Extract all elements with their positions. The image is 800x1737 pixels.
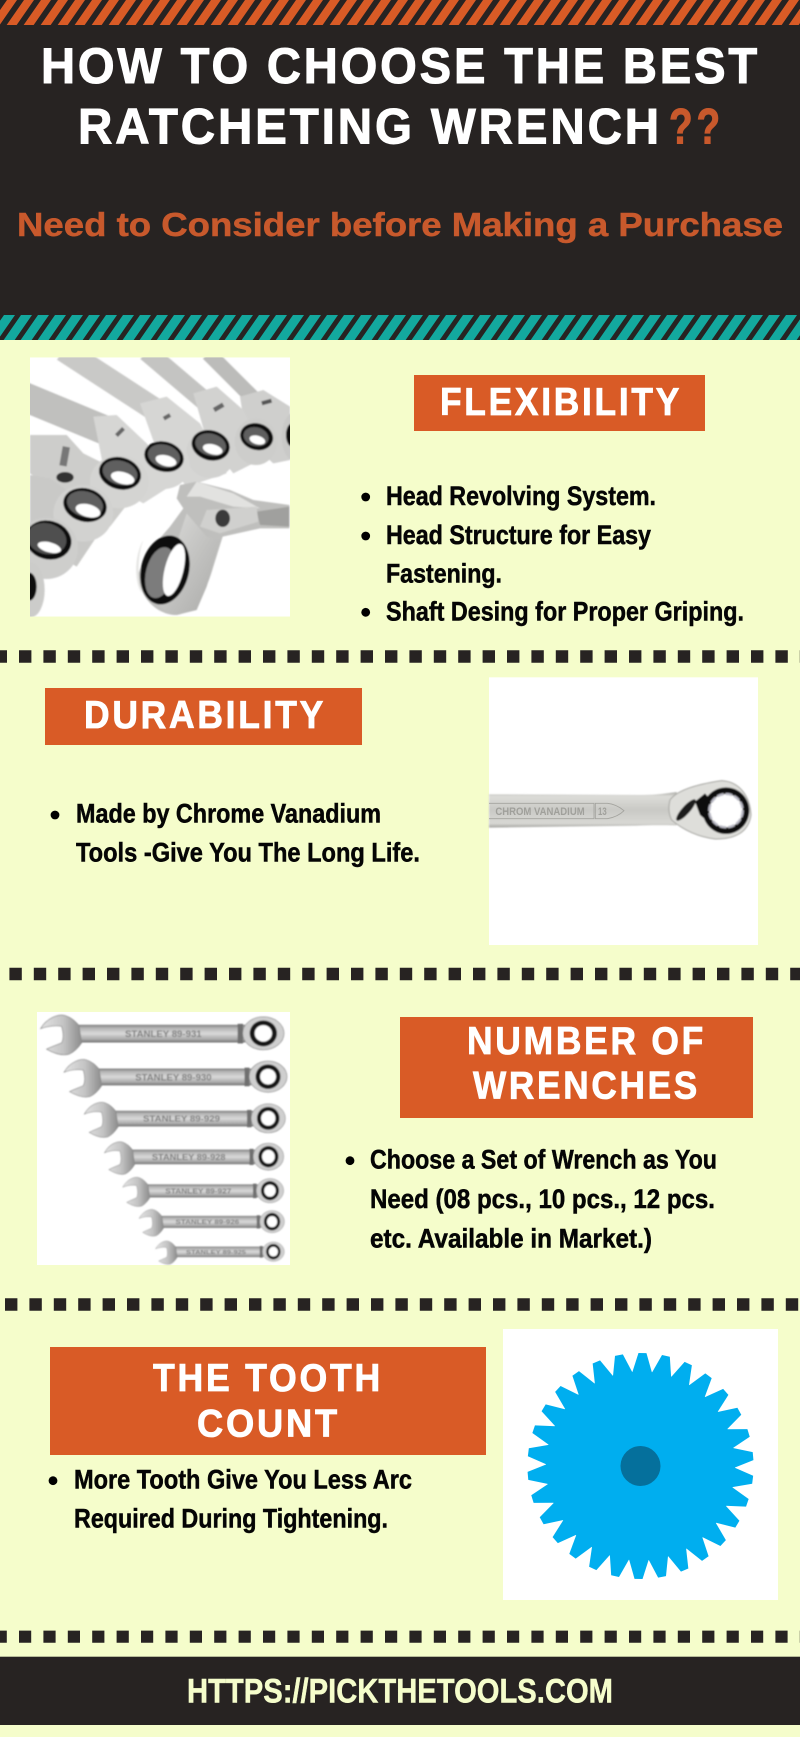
image: set of seven wrenches	[37, 1012, 290, 1265]
image: chrome vanadium wrench: CHROM VANADIUM	[495, 806, 585, 818]
wrench 6: STANLEY 89-926	[176, 1219, 240, 1226]
wrench 4: STANLEY 89-928	[152, 1153, 225, 1162]
ring heads	[242, 429, 270, 466]
image: chrome vanadium wrench: 13	[598, 806, 607, 818]
wrench 1: STANLEY 89-931	[125, 1029, 202, 1040]
title	[41, 38, 760, 154]
bullet list: the tooth count: Required During Tightening.	[74, 1503, 388, 1533]
wrench 5	[123, 1177, 284, 1206]
heading: durability: DURABILITY	[84, 694, 326, 737]
heading: flexibility	[414, 375, 705, 431]
wrench 2	[64, 1059, 287, 1097]
panel: durability	[45, 677, 758, 945]
heading: the tooth count: THE TOOTH	[153, 1357, 383, 1400]
bullet list: number of wrenches: Need (08 pcs., 10 pcs., 12 pcs.	[370, 1184, 715, 1214]
right edge head	[288, 414, 290, 460]
heading: number of wrenches: WRENCHES	[473, 1065, 700, 1108]
image: chrome vanadium wrench	[489, 677, 758, 945]
bullet list: flexibility: Head Structure for Easy	[386, 520, 651, 550]
bullet list: durability	[51, 799, 420, 867]
wrench 7: STANLEY 89-925	[186, 1250, 246, 1256]
panel: flexibility	[15, 350, 744, 627]
wrench 3	[84, 1102, 285, 1137]
footer band	[0, 1657, 800, 1725]
bullet list: flexibility: Fastening.	[386, 558, 502, 588]
heading: flexibility: FLEXIBILITY	[440, 381, 682, 424]
image: blue gear	[503, 1329, 778, 1600]
bullet list: the tooth count	[49, 1464, 412, 1533]
bullet list: number of wrenches: etc. Available in Market.)	[370, 1223, 652, 1253]
subtitle: Need to Consider before Making a Purchase	[17, 207, 783, 244]
heading: durability	[45, 688, 362, 745]
wrench 6	[139, 1209, 284, 1236]
bullet list: flexibility: Shaft Desing for Proper Griping.	[386, 597, 744, 627]
header banner	[0, 0, 800, 340]
panel: number of wrenches	[37, 1012, 753, 1265]
bullet list: the tooth count: More Tooth Give You Less Arc	[74, 1464, 412, 1494]
heading: number of wrenches: NUMBER OF	[467, 1020, 706, 1063]
bullet list: number of wrenches: Choose a Set of Wrench as You	[370, 1145, 717, 1175]
bullet list: flexibility	[361, 481, 744, 627]
wrench 1	[41, 1015, 284, 1055]
front wrench	[138, 482, 289, 615]
title: ??	[669, 98, 724, 154]
bullet list: durability: Tools -Give You The Long Life.	[76, 837, 420, 867]
title: RATCHETING WRENCH	[78, 98, 662, 154]
bullet list: number of wrenches	[346, 1145, 717, 1253]
heading: the tooth count: COUNT	[197, 1403, 340, 1446]
wrench 7	[156, 1241, 284, 1264]
wrench 4	[105, 1142, 284, 1174]
wrench 2: STANLEY 89-930	[135, 1072, 212, 1082]
bullet list: flexibility: Head Revolving System.	[386, 481, 656, 511]
heading: the tooth count	[50, 1347, 486, 1455]
heading: number of wrenches	[400, 1017, 753, 1118]
wrench 3: STANLEY 89-929	[143, 1114, 220, 1124]
title: HOW TO CHOOSE THE BEST	[41, 38, 760, 94]
image: flexible head wrenches	[30, 357, 290, 617]
wrench 5: STANLEY 89-927	[165, 1188, 232, 1196]
footer url: HTTPS://PICKTHETOOLS.COM	[187, 1673, 613, 1711]
bullet list: durability: Made by Chrome Vanadium	[76, 799, 381, 829]
panel: the tooth count	[49, 1329, 778, 1600]
